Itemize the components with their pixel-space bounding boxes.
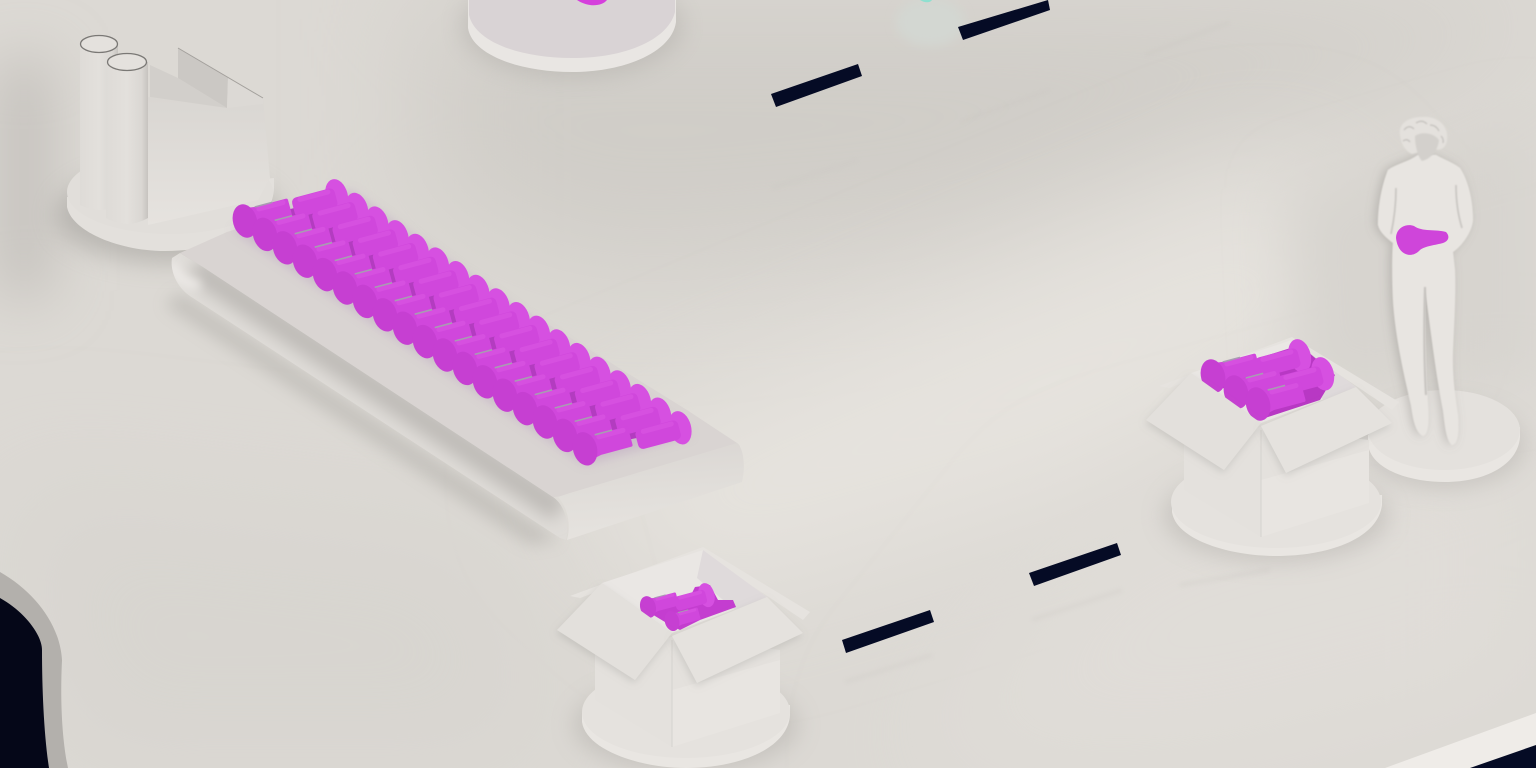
platform edge bottom right	[1385, 713, 1536, 768]
figure body	[1378, 155, 1473, 445]
dash	[958, 0, 1050, 40]
dash	[1029, 543, 1121, 586]
belt underside	[172, 253, 567, 540]
dash	[842, 610, 934, 653]
box full of dumbbells	[1146, 337, 1399, 561]
factory roof faces	[150, 65, 227, 108]
box contents	[1197, 337, 1338, 424]
box floor shadow	[1164, 469, 1388, 561]
chimney front	[106, 54, 148, 224]
dumbbell tip on top disc	[577, 0, 607, 5]
held dumbbell	[1396, 225, 1448, 255]
box base disc	[1171, 456, 1382, 556]
figure floor shadow	[1364, 403, 1524, 487]
factory body	[148, 97, 270, 225]
platform edge bottom left	[0, 572, 68, 768]
top disc platform	[462, 0, 682, 76]
belt front lip	[558, 443, 744, 540]
chimney back	[80, 36, 118, 210]
box base disc	[582, 666, 790, 768]
box contents	[638, 581, 736, 633]
figure shading	[1391, 185, 1462, 395]
faded teal item at top	[896, 0, 964, 46]
belt floor shadow	[165, 292, 560, 545]
dumbbell backing	[245, 197, 679, 449]
conveyor belt	[165, 177, 744, 545]
dash	[771, 64, 862, 107]
box floor shadow	[574, 679, 798, 768]
figure hair	[1400, 117, 1447, 154]
belt top surface	[180, 195, 740, 497]
figure base disc	[1368, 390, 1520, 482]
factory	[56, 36, 280, 263]
figure face	[1415, 133, 1439, 161]
dumbbells	[229, 177, 695, 468]
box with few dumbbells	[557, 547, 810, 768]
woman figure with base	[1364, 117, 1524, 487]
dumbbell shadow	[232, 190, 692, 465]
